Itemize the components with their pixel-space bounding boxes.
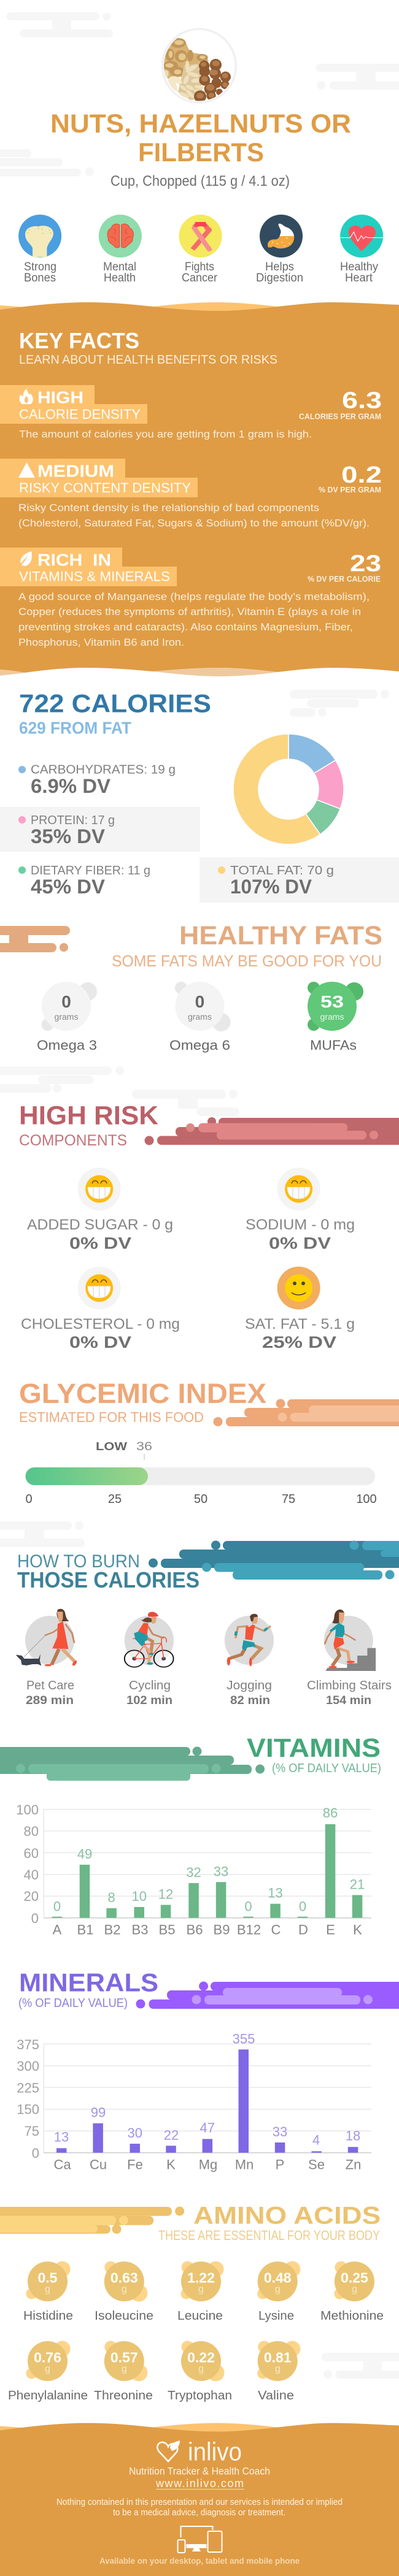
fact: rich in vitamins and minerals: preventing strokes and cataracts). Also contains Magnesium, Fiber, [18,622,353,633]
bar chart: minerals % daily value: Ca [53,2157,71,2173]
bubble: methionine: g [352,2284,357,2295]
stat: total fat: TOTAL FAT: 70 g [230,864,334,877]
label: fights cancer: Fights [185,261,214,273]
heading: vitamins: (% OF DAILY VALUE) [272,1762,381,1775]
bar chart: vitamins % daily value: A [53,1922,62,1937]
gauge: glycemic index value: 100 [356,1492,377,1506]
component: saturated fat: SAT. FAT - 5.1 g [245,1316,355,1332]
bar chart: vitamins % daily value: B2 [104,1922,120,1937]
logo: inlivo: inlivo [188,2437,242,2466]
heading: high risk: COMPONENTS [19,1132,127,1149]
icon: devices [178,2526,222,2553]
title [50,109,351,167]
stat: total fat: 107% DV [230,876,312,898]
bar chart: minerals % daily value: K [166,2157,176,2173]
bubble: leucine: g [198,2284,204,2295]
bar chart: vitamins % daily value: 33 [214,1863,228,1879]
label: fights cancer: Cancer [182,272,218,285]
icon: heart [340,215,383,258]
bubble: histidine: g [45,2284,50,2295]
heading: glycemic index [19,1378,266,1425]
bubble: MUFAs: MUFAs [310,1038,357,1053]
bar chart: vitamins % daily value: 13 [268,1886,283,1901]
bubble: leucine: Leucine [177,2309,223,2323]
fact: high calorie density: 6.3 [342,388,382,414]
bubble: methionine: 0.25 [341,2270,368,2286]
heading: high risk: HIGH RISK [19,1101,158,1130]
fact: rich in vitamins and minerals: RICH IN [37,551,111,569]
bubble: methionine [320,2261,384,2323]
bar chart: vitamins % daily value: 32 [186,1865,201,1880]
stat: dietary fiber [18,864,150,898]
bubble: histidine: 0.5 [38,2270,58,2286]
component: sodium: SODIUM - 0 mg [246,1217,355,1233]
heading: how to burn [17,1551,200,1592]
bar chart: minerals % daily value: 0 [32,2146,39,2161]
bubble: valine: g [275,2364,281,2374]
bubble: tryptophan: g [198,2364,204,2374]
bubble: MUFAs: grams [320,1012,344,1022]
fact: rich in vitamins and minerals: A good source of Manganese (helps regulate the body’s metabolism), [18,591,370,602]
fact: medium risky content density: RISKY CONTENT DENSITY [19,480,191,495]
bar chart: vitamins % daily value [16,1802,371,1937]
bubble: threonine: 0.57 [110,2350,138,2366]
panel: glycemic index [19,1378,399,1506]
activity: climbing stairs: 154 min [326,1694,371,1707]
bubble: omega 6: grams [188,1012,212,1022]
bubble: leucine: 1.22 [187,2270,215,2286]
bar chart: vitamins % daily value: B1 [77,1922,93,1937]
activity: cycling: Cycling [129,1679,171,1692]
icon: leaf [20,551,32,566]
stat: protein: PROTEIN: 17 g [31,814,115,827]
subtitle: serving size: Cup, Chopped (115 g / 4.1 oz) [110,173,290,189]
activity: pet care: 289 min [26,1694,74,1707]
stat: protein: 35% DV [31,825,106,847]
label: helps digestion: Digestion [256,272,303,285]
gauge: glycemic index value: LOW [96,1440,127,1453]
icon: strong bones [18,215,61,258]
icon: stomach [260,215,303,258]
bubble: tryptophan [168,2341,232,2402]
donut chart: macronutrients [233,734,344,844]
bar chart: minerals % daily value: 4 [312,2132,320,2147]
heading: key facts [19,328,277,367]
icon: nuts photo in circle [162,29,236,102]
panel: high risk components [19,1101,399,1351]
fact: rich in vitamins and minerals: Copper (reduces the symptoms of arthritis), Vitamin E (plays a role in [18,606,361,617]
icon: brain [99,215,142,258]
bubble: threonine: Threonine [94,2389,153,2402]
fact: rich in vitamins and minerals: 23 [350,551,381,577]
label: strong bones: Bones [24,272,56,285]
fact: high calorie density: The amount of calories you are getting from 1 gram is high. [19,429,312,440]
bar chart: vitamins % daily value: 12 [158,1886,173,1902]
bar chart: minerals % daily value: 150 [17,2102,39,2117]
stat: dietary fiber: DIETARY FIBER: 11 g [31,864,150,877]
component: sodium: 0% DV [269,1234,331,1253]
bar chart: vitamins % daily value: 10 [131,1889,147,1904]
bubble: isoleucine [95,2261,153,2323]
bar chart: vitamins % daily value: B3 [132,1922,148,1937]
fact: rich in vitamins and minerals: % DV PER CALORIE [308,574,381,584]
label: mental health: Health [104,272,136,285]
fact: rich in vitamins and minerals: VITAMINS & MINERALS [19,569,170,584]
bubble: tryptophan: Tryptophan [168,2389,232,2402]
bubble: leucine [177,2261,223,2323]
heading: how to burn: THOSE CALORIES [17,1567,200,1592]
bar chart: vitamins % daily value: 0 [244,1899,252,1914]
fact: rich in vitamins and minerals: Phosphorus, Vitamin B6 and Iron. [18,637,184,648]
bar chart: minerals % daily value: Cu [90,2157,107,2173]
fact: rich in vitamins and minerals [0,548,381,648]
bar chart: vitamins % daily value: B6 [187,1922,203,1937]
bubble: phenylalanine [8,2341,88,2402]
panel: footer [0,2423,399,2576]
bubble: isoleucine: Isoleucine [95,2309,153,2323]
stat: total fat [200,857,399,903]
bar chart: vitamins % daily value: 86 [323,1805,338,1821]
bar chart: minerals % daily value: Se [308,2157,325,2173]
label: healthy heart [340,261,378,285]
panel: minerals [17,1968,399,2173]
bar chart: minerals % daily value: 300 [17,2058,39,2074]
heading: key facts: LEARN ABOUT HEALTH BENEFITS OR RISKS [19,353,277,367]
bubble: MUFAs: 53 [320,992,344,1011]
fact: high calorie density [0,385,382,440]
bar chart: vitamins % daily value: E [326,1922,335,1937]
stat: carbohydrates: CARBOHYDRATES: 19 g [31,763,176,777]
bar chart: minerals % daily value: Zn [346,2157,361,2173]
heading: 722 calories [19,689,211,738]
component: added sugar [27,1168,173,1253]
icon: warning triangle [18,462,35,478]
heading: minerals: (% OF DAILY VALUE) [18,1997,128,2010]
heading: healthy fats: SOME FATS MAY BE GOOD FOR YOU [112,952,382,970]
bubble: valine: 0.81 [264,2350,292,2366]
bubble: isoleucine: 0.63 [110,2270,138,2286]
logo: inlivo [157,2437,242,2466]
bubble: lysine: 0.48 [264,2270,292,2286]
fact: high calorie density: HIGH [37,388,83,407]
bubble: valine: Valine [258,2389,294,2402]
heading: how to burn: HOW TO BURN [17,1551,140,1572]
activity: climbing stairs [307,1610,392,1707]
bar chart: minerals % daily value: Mg [199,2157,217,2173]
title: FILBERTS [138,138,264,167]
bar chart: minerals % daily value: 22 [164,2127,179,2142]
bar chart: vitamins % daily value: 8 [107,1890,115,1905]
heading: vitamins [247,1733,381,1775]
heading: amino acids [158,2203,381,2243]
icon: flame [20,389,33,404]
icon: cancer ribbon [179,215,222,258]
bubble: histidine [23,2261,73,2323]
component: sodium [246,1168,355,1253]
component: cholesterol: 0% DV [69,1333,131,1351]
bubble: phenylalanine: g [45,2364,50,2374]
label: healthy heart: Heart [345,272,373,285]
bar chart: minerals % daily value: 30 [127,2125,142,2141]
bubble: lysine: Lysine [258,2309,294,2323]
activity: cycling: 102 min [126,1694,172,1707]
gauge: glycemic index value: 50 [194,1492,207,1506]
bar chart: vitamins % daily value: 80 [24,1824,39,1839]
heading: 722 calories: 722 CALORIES [19,689,211,718]
title: NUTS, HAZELNUTS OR [50,109,351,139]
bar chart: vitamins % daily value: 100 [16,1802,39,1817]
bar chart: vitamins % daily value: 49 [77,1846,92,1862]
bar chart: vitamins % daily value: C [271,1922,281,1937]
bubble: omega 3: 0 [61,992,71,1011]
text: available on devices: Available on your desktop, tablet and mobile phone [99,2556,300,2566]
stat: dietary fiber: 45% DV [31,876,106,898]
gauge: glycemic index value: 75 [282,1492,295,1506]
bar chart: vitamins % daily value: B5 [159,1922,175,1937]
label: strong bones: Strong [24,261,56,273]
panel: amino acids [0,2203,384,2402]
text: disclaimer: to be a medical advice, diagnosis or treatment. [113,2508,285,2518]
activity: jogging: Jogging [227,1679,272,1692]
bubble: omega 3: grams [55,1012,78,1022]
component: saturated fat [245,1267,355,1351]
bubble: omega 6: 0 [195,992,204,1011]
bar chart: vitamins % daily value: 0 [299,1899,306,1914]
activity: pet care [16,1609,78,1707]
bubble: histidine: Histidine [23,2309,73,2323]
bar chart: vitamins % daily value: 40 [24,1867,39,1882]
heading: glycemic index: GLYCEMIC INDEX [19,1378,266,1409]
component: added sugar: 0% DV [69,1234,131,1253]
fact: medium risky content density: % DV PER GRAM [319,485,381,494]
bar chart: minerals % daily value: 75 [25,2123,39,2139]
component: cholesterol: CHOLESTEROL - 0 mg [21,1316,180,1332]
heading: amino acids: AMINO ACIDS [193,2203,381,2230]
activity: climbing stairs: Climbing Stairs [307,1679,392,1692]
bubble: methionine: Methionine [320,2309,384,2323]
bubble: threonine [94,2341,153,2402]
bar chart: minerals % daily value: 375 [17,2037,39,2052]
label: strong bones [24,261,56,285]
fact: medium risky content density: 0.2 [341,462,382,488]
text: tagline and website: Nutrition Tracker & Health Coach [129,2465,270,2477]
fact: medium risky content density [0,459,382,529]
fact: high calorie density: CALORIE DENSITY [19,407,141,422]
activity: pet care: Pet Care [26,1679,74,1692]
bar chart: vitamins % daily value: 20 [24,1889,39,1904]
bubble: valine [257,2341,300,2402]
activity: jogging [225,1614,274,1707]
gauge: glycemic index value: 0 [25,1492,33,1506]
bar chart: vitamins % daily value: 60 [24,1846,39,1861]
panel: health benefit icons [18,215,383,285]
activity: cycling [125,1612,174,1707]
label: healthy heart: Healthy [340,261,378,273]
bubble: phenylalanine: Phenylalanine [8,2389,88,2402]
bar chart: minerals % daily value: 33 [273,2124,287,2139]
label: mental health: Mental [103,261,136,273]
bar chart: minerals % daily value: Mn [235,2157,254,2173]
label: fights cancer [182,261,218,285]
bubble: omega 6 [169,982,231,1053]
bubble: tryptophan: 0.22 [187,2350,215,2366]
gauge: glycemic index value: 25 [108,1492,122,1506]
bar chart: minerals % daily value: P [276,2157,284,2173]
fact: medium risky content density: (Cholesterol, Saturated Fat, Sugars & Sodium) to the amount (%DV/gr). [18,518,370,529]
bubble: threonine: g [122,2364,127,2374]
bar chart: vitamins % daily value: B9 [214,1922,230,1937]
bubble: lysine: g [275,2284,281,2295]
bar chart: vitamins % daily value: 21 [350,1876,365,1892]
bar chart: minerals % daily value: 13 [54,2130,69,2145]
bar chart: vitamins % daily value: K [353,1922,362,1937]
heading: high risk [19,1101,158,1149]
heading: vitamins: VITAMINS [247,1733,381,1763]
stat: carbohydrates [18,763,176,797]
bar chart: vitamins % daily value: 0 [31,1911,39,1926]
bar chart: vitamins % daily value: B12 [237,1922,261,1937]
bar chart: minerals % daily value: 225 [17,2080,39,2096]
text: disclaimer [56,2498,343,2518]
panel: key facts [0,302,399,676]
bar chart: vitamins % daily value: D [298,1922,308,1937]
bar chart: minerals % daily value: Fe [127,2157,143,2173]
stat: carbohydrates: 6.9% DV [31,775,111,797]
fact: medium risky content density: Risky Content density is the relationship of bad components [18,503,319,514]
heading: key facts: KEY FACTS [19,328,139,353]
panel: healthy fats [0,921,382,1053]
bar chart: vitamins % daily value: 0 [53,1899,61,1914]
component: cholesterol [21,1267,180,1351]
gauge: glycemic index value [25,1440,377,1506]
fact: medium risky content density: MEDIUM [37,461,114,481]
bubble: MUFAs [308,982,363,1053]
bar chart: minerals % daily value [17,2031,371,2173]
label: helps digestion: Helps [265,261,294,273]
bar chart: minerals % daily value: 355 [233,2031,255,2046]
component: added sugar: ADDED SUGAR - 0 g [27,1217,173,1233]
bar chart: minerals % daily value: 18 [346,2128,360,2144]
bubble: phenylalanine: 0.76 [34,2350,61,2366]
label: helps digestion [256,261,303,285]
panel: how to burn those calories [16,1540,399,1707]
heading: healthy fats [112,921,382,970]
panel: vitamins [0,1733,381,1937]
heading: 722 calories: 629 FROM FAT [19,719,131,738]
bubble: omega 3: Omega 3 [37,1038,97,1053]
bar chart: minerals % daily value: 47 [200,2120,215,2135]
bubble: omega 6: Omega 6 [169,1038,230,1053]
bubble: lysine [257,2261,300,2323]
text: tagline and website: www.inlivo.com [155,2477,244,2490]
component: saturated fat: 25% DV [262,1333,336,1351]
panel: calories [0,689,399,903]
bubble: omega 3 [37,982,97,1053]
stat: protein [0,807,200,852]
bubble: isoleucine: g [122,2284,127,2295]
activity: jogging: 82 min [230,1694,270,1707]
gauge: glycemic index value: 36 [136,1440,152,1453]
fact: high calorie density: CALORIES PER GRAM [299,412,381,421]
heading: minerals [18,1968,158,2010]
bar chart: minerals % daily value: 99 [91,2105,106,2120]
text: disclaimer: Nothing contained in this presentation and our services is intended or implied [56,2498,343,2507]
label: mental health [103,261,136,285]
text: tagline and website [129,2465,270,2490]
heading: glycemic index: ESTIMATED FOR THIS FOOD [19,1409,204,1425]
heading: healthy fats: HEALTHY FATS [179,921,382,950]
heading: minerals: MINERALS [19,1968,158,1997]
